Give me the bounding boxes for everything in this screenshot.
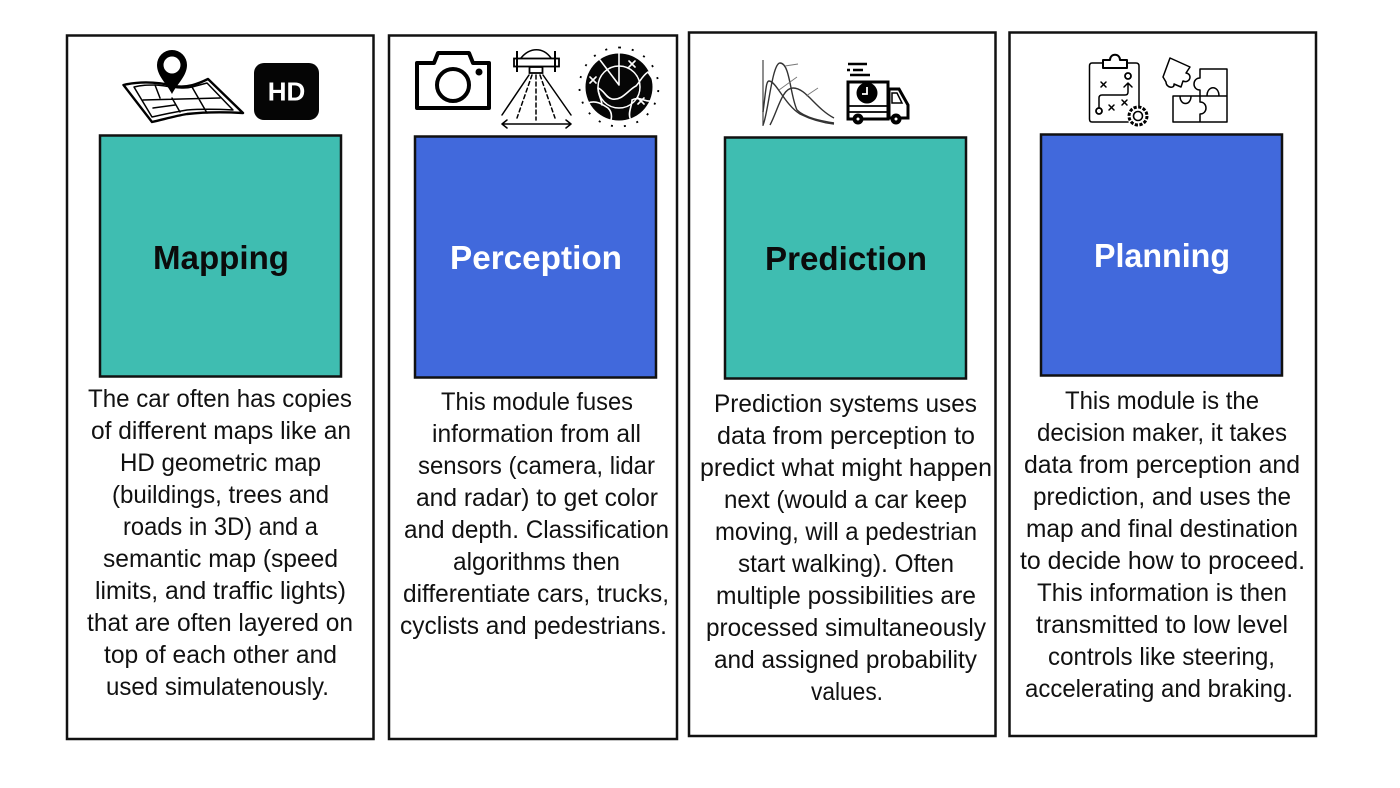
text block: mapping description: limits, and traffic lights) (95, 578, 346, 605)
text block: mapping description: that are often layered on (87, 610, 353, 637)
heading: Perception: Perception (450, 239, 622, 276)
heading box: Planning (1041, 134, 1282, 376)
text block: prediction description: processed simultaneously (706, 615, 987, 642)
icon: radar map (579, 48, 658, 126)
text block: prediction description: next (would a car keep (724, 487, 967, 514)
text block: mapping description: (buildings, trees and (112, 482, 329, 509)
text block: planning description: to decide how to proceed. (1020, 548, 1305, 575)
icon: HD badge (254, 63, 319, 120)
text block: planning description: This information is then (1037, 580, 1287, 607)
text block: planning description: prediction, and uses the (1033, 484, 1291, 511)
text block: mapping description: used simulatenously. (106, 674, 329, 701)
text block: prediction description: data from perception to (717, 423, 975, 450)
text block: planning description: map and final destination (1026, 516, 1298, 543)
icon: HD badge: HD (268, 76, 305, 106)
panel: mapping (67, 36, 374, 739)
text block: planning description: This module is the (1065, 388, 1259, 415)
text block: prediction description: predict what might happen (700, 455, 992, 482)
icon: delivery truck with clock (847, 64, 908, 124)
text block: planning description: accelerating and braking. (1025, 676, 1293, 703)
heading: Prediction: Prediction (765, 240, 927, 277)
text block: mapping description: semantic map (speed (103, 546, 338, 573)
icon: lidar sensor (502, 50, 571, 128)
text block: perception description (400, 389, 669, 640)
text block: prediction description (700, 391, 992, 706)
heading box: Prediction (725, 138, 966, 378)
text block: prediction description: multiple possibilities are (716, 583, 976, 610)
text block: mapping description (87, 386, 353, 701)
text block: planning description: transmitted to low level (1036, 612, 1288, 639)
text block: planning description: controls like steering, (1048, 644, 1275, 671)
text block: prediction description: and assigned probability (714, 647, 978, 674)
panel: prediction (689, 32, 996, 736)
text block: perception description: This module fuses (441, 389, 633, 416)
icon: folded map with location pin (124, 50, 243, 122)
text block: perception description: information from all (432, 421, 641, 448)
text block: mapping description: top of each other and (104, 642, 337, 669)
heading: Mapping: Mapping (153, 239, 289, 276)
text block: prediction description: values. (811, 679, 883, 706)
heading: Planning: Planning (1094, 237, 1230, 274)
text block: perception description: sensors (camera, lidar (418, 453, 655, 480)
text block: prediction description: start walking). Often (738, 551, 954, 578)
panel: planning (1010, 32, 1316, 736)
text block: planning description (1020, 388, 1305, 703)
icon: camera (417, 53, 489, 108)
text block: prediction description: Prediction systems uses (714, 391, 977, 418)
heading box: Perception (415, 136, 656, 378)
text block: perception description: and radar) to get color (416, 485, 658, 512)
text block: perception description: and depth. Classification (404, 517, 669, 544)
heading box: Mapping (100, 136, 341, 376)
text block: mapping description: roads in 3D) and a (123, 514, 318, 541)
text block: mapping description: The car often has copies (88, 386, 352, 413)
text block: mapping description: of different maps like an (91, 418, 351, 445)
text block: prediction description: moving, will a pedestrian (715, 519, 977, 546)
panel: perception (389, 36, 677, 739)
panel frame: perception (389, 36, 677, 739)
text block: perception description: differentiate cars, trucks, (403, 581, 669, 608)
text block: planning description: data from perception and (1024, 452, 1300, 479)
icon: clipboard game plan with gear (1090, 55, 1147, 125)
icon: puzzle pieces (1163, 58, 1227, 122)
text block: mapping description: HD geometric map (120, 450, 321, 477)
panel frame: prediction (689, 32, 996, 736)
text block: perception description: algorithms then (453, 549, 620, 576)
panel frame: mapping (67, 36, 374, 739)
icon: probability curves chart (763, 60, 834, 126)
text block: planning description: decision maker, it takes (1037, 420, 1287, 447)
panel frame: planning (1010, 32, 1316, 736)
text block: perception description: cyclists and pedestrians. (400, 613, 667, 640)
